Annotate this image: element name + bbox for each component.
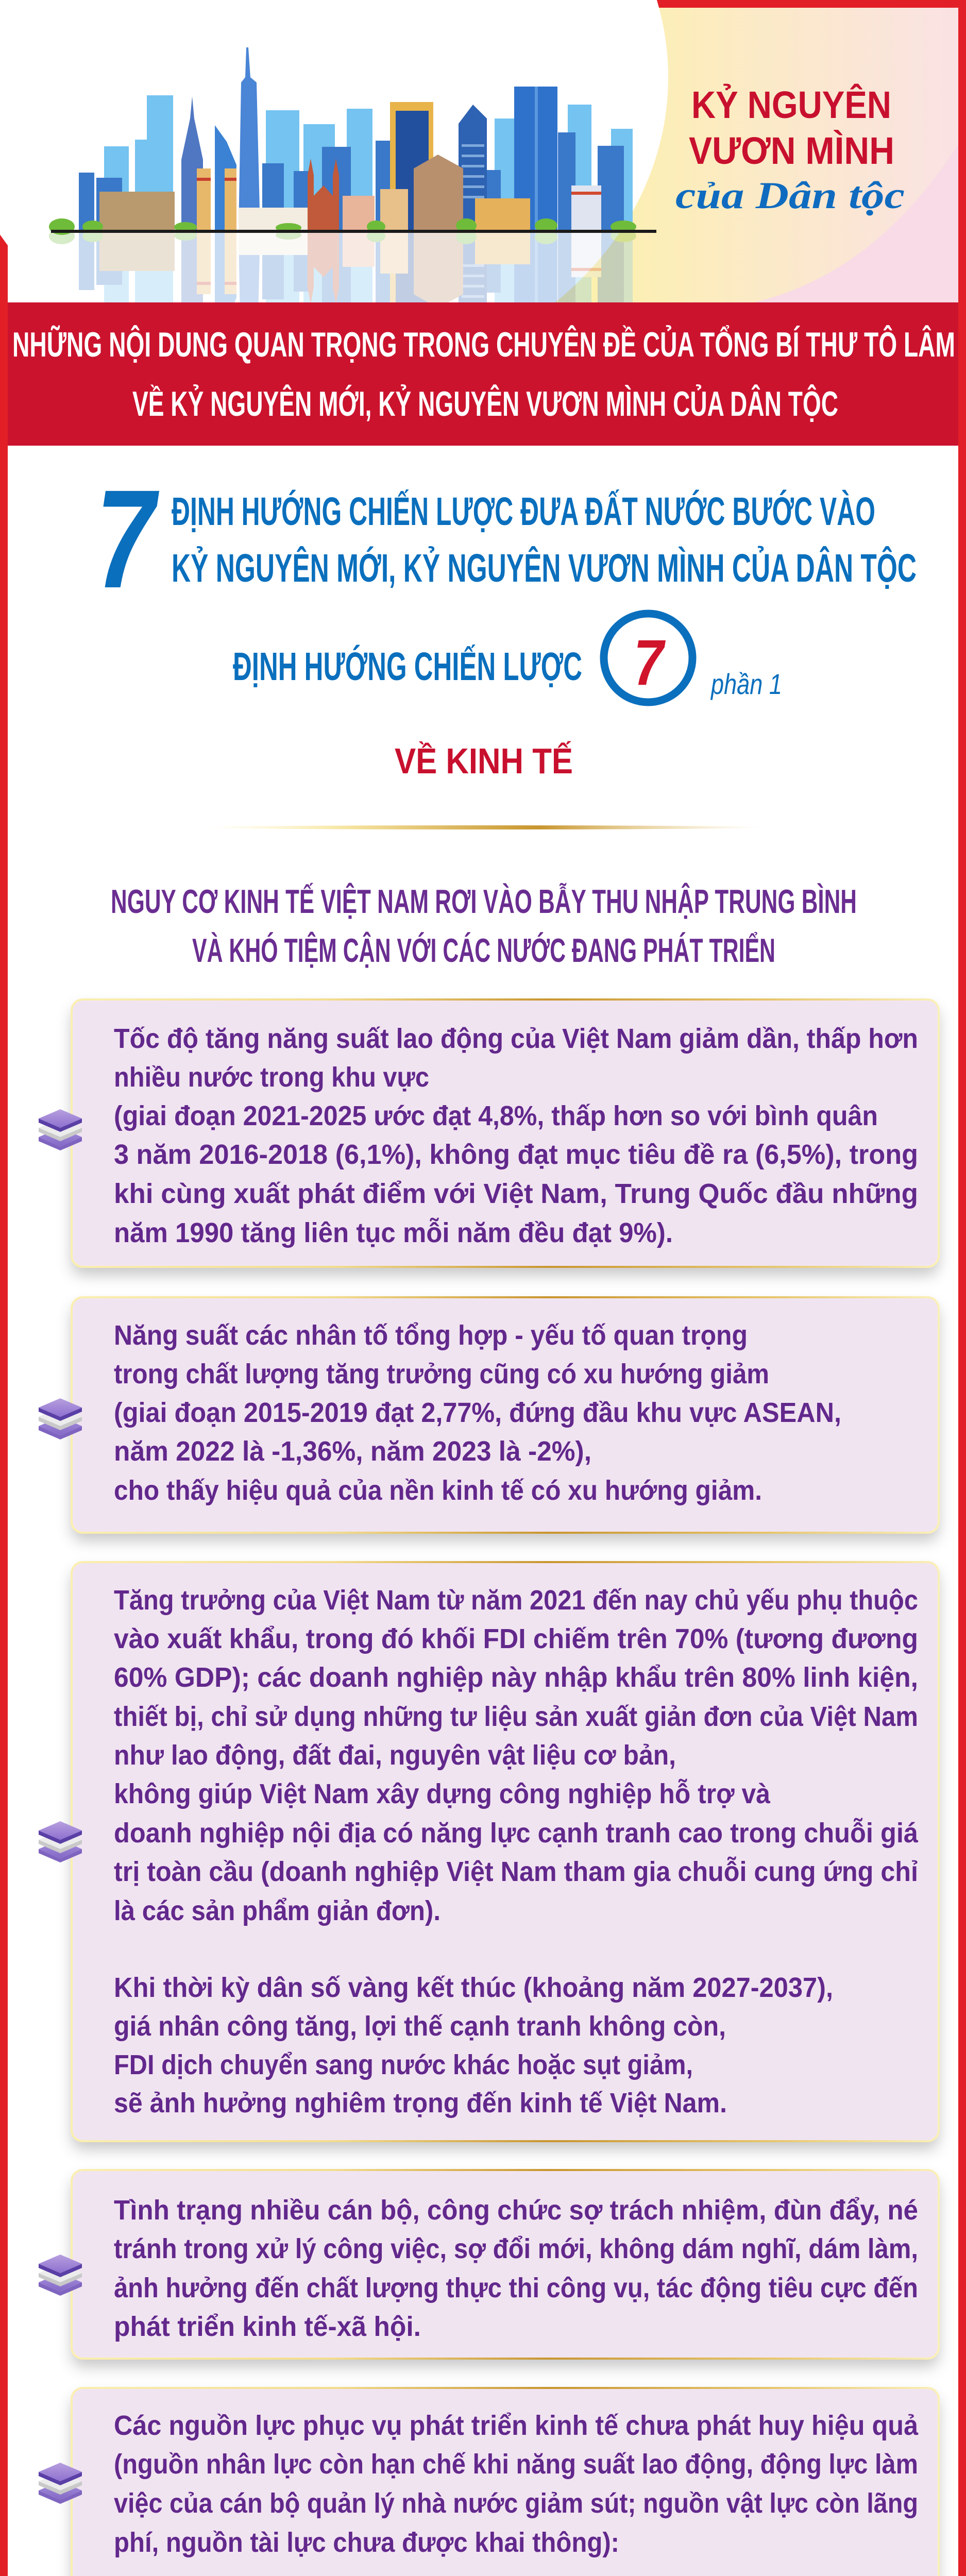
main heading: 7 strategic orientations [103,489,916,589]
text block: Tình trạng nhiều cán bộ, công chức sợ trách nhiệm, đùn đẩy, né [114,2195,918,2226]
text block [114,1023,918,1248]
text block: 3 năm 2016-2018 (6,1%), không đạt mục tiêu đề ra (6,5%), trong [114,1139,918,1170]
red title band [8,302,958,446]
text block [114,1320,841,1506]
text block: Các nguồn lực phục vụ phát triển kinh tế chưa phát huy hiệu quả [114,2410,919,2441]
text block: giá nhân công tăng, lợi thế cạnh tranh không còn, [114,2011,726,2042]
text block: phí, nguồn tài lực chưa được khai thông): [114,2527,619,2558]
text block: Tốc độ tăng năng suất lao động của Việt Nam giảm dần, thấp hơn [114,1023,918,1054]
icon: number 7 circle: 7 [634,627,666,699]
panel: labour productivity [39,999,939,1267]
icon: layers [39,2255,82,2296]
text block: Năng suất các nhân tố tổng hợp - yếu tố quan trọng [114,1320,748,1351]
text block: doanh nghiệp nội địa có năng lực cạnh tranh cao trong chuỗi giá [114,1818,919,1849]
text block: phát triển kinh tế-xã hội. [114,2311,421,2342]
subheading: orientation 7 part 1: phần 1 [710,668,782,700]
icon: number 7 circle [604,614,692,702]
text block: (giai đoạn 2021-2025 ước đạt 4,8%, thấp hơn so với bình quân [114,1100,878,1131]
panel: total factor productivity [39,1297,939,1533]
big number 7: 7 [96,461,161,617]
subheading: orientation 7 part 1: ĐỊNH HƯỚNG CHIẾN LƯỢC [233,644,582,689]
subheading: orientation 7 part 1 [233,614,782,702]
text block: nhiều nước trong khu vực [114,1062,429,1093]
text block: 60% GDP); các doanh nghiệp này nhập khẩu trên 80% linh kiện, [114,1662,918,1693]
text block [114,2195,918,2342]
text block: trong chất lượng tăng trưởng cũng có xu hướng giảm [114,1359,769,1389]
panel: resources not effective [39,2388,939,2576]
skyline illustration [49,47,656,302]
text block: FDI dịch chuyển sang nước khác hoặc sụt giảm, [114,2049,693,2080]
text block: trị toàn cầu (doanh nghiệp Việt Nam tham gia chuỗi cung ứng chỉ [114,1856,918,1887]
text block [114,2410,919,2558]
text block: (giai đoạn 2015-2019 đạt 2,77%, đứng đầu khu vực ASEAN, [114,1397,841,1428]
text block: Khi thời kỳ dân số vàng kết thúc (khoảng năm 2027-2037), [114,1972,833,2003]
banner title: của Dân tộc [675,175,905,217]
section heading: middle income trap [111,883,857,969]
text block: sẽ ảnh hưởng nghiêm trọng đến kinh tế Việt Nam. [114,2088,727,2119]
text block: năm 1990 tăng liên tục mỗi năm đều đạt 9%). [114,1217,673,1248]
panel: export and FDI dependence [39,1562,939,2141]
text block: như lao động, đất đai, nguyên vật liệu cơ bản, [114,1740,676,1771]
banner title [675,83,905,217]
icon: layers [39,1821,82,1862]
banner: header illustration [0,0,958,302]
text block: năm 2022 là -1,36%, năm 2023 là -2%), [114,1436,591,1467]
text block: cho thấy hiệu quả của nền kinh tế có xu hướng giảm. [114,1475,762,1506]
text block [114,1585,919,2119]
icon: layers [39,2463,82,2504]
text block: vào xuất khẩu, trong đó khối FDI chiếm trên 70% (tương đương [114,1623,918,1654]
icon: layers [39,1398,82,1439]
text block: là các sản phẩm giản đơn). [114,1895,440,1926]
icon: layers [39,1109,82,1150]
text block: không giúp Việt Nam xây dựng công nghiệp hỗ trợ và [114,1778,771,1809]
banner title: KỶ NGUYÊN [691,83,891,126]
text block: khi cùng xuất phát điểm với Việt Nam, Trung Quốc đầu những [114,1178,918,1209]
panel: officials fear responsibility [39,2170,939,2359]
banner title: VƯƠN MÌNH [689,129,894,172]
heading: economy: VỀ KINH TẾ [395,741,573,781]
